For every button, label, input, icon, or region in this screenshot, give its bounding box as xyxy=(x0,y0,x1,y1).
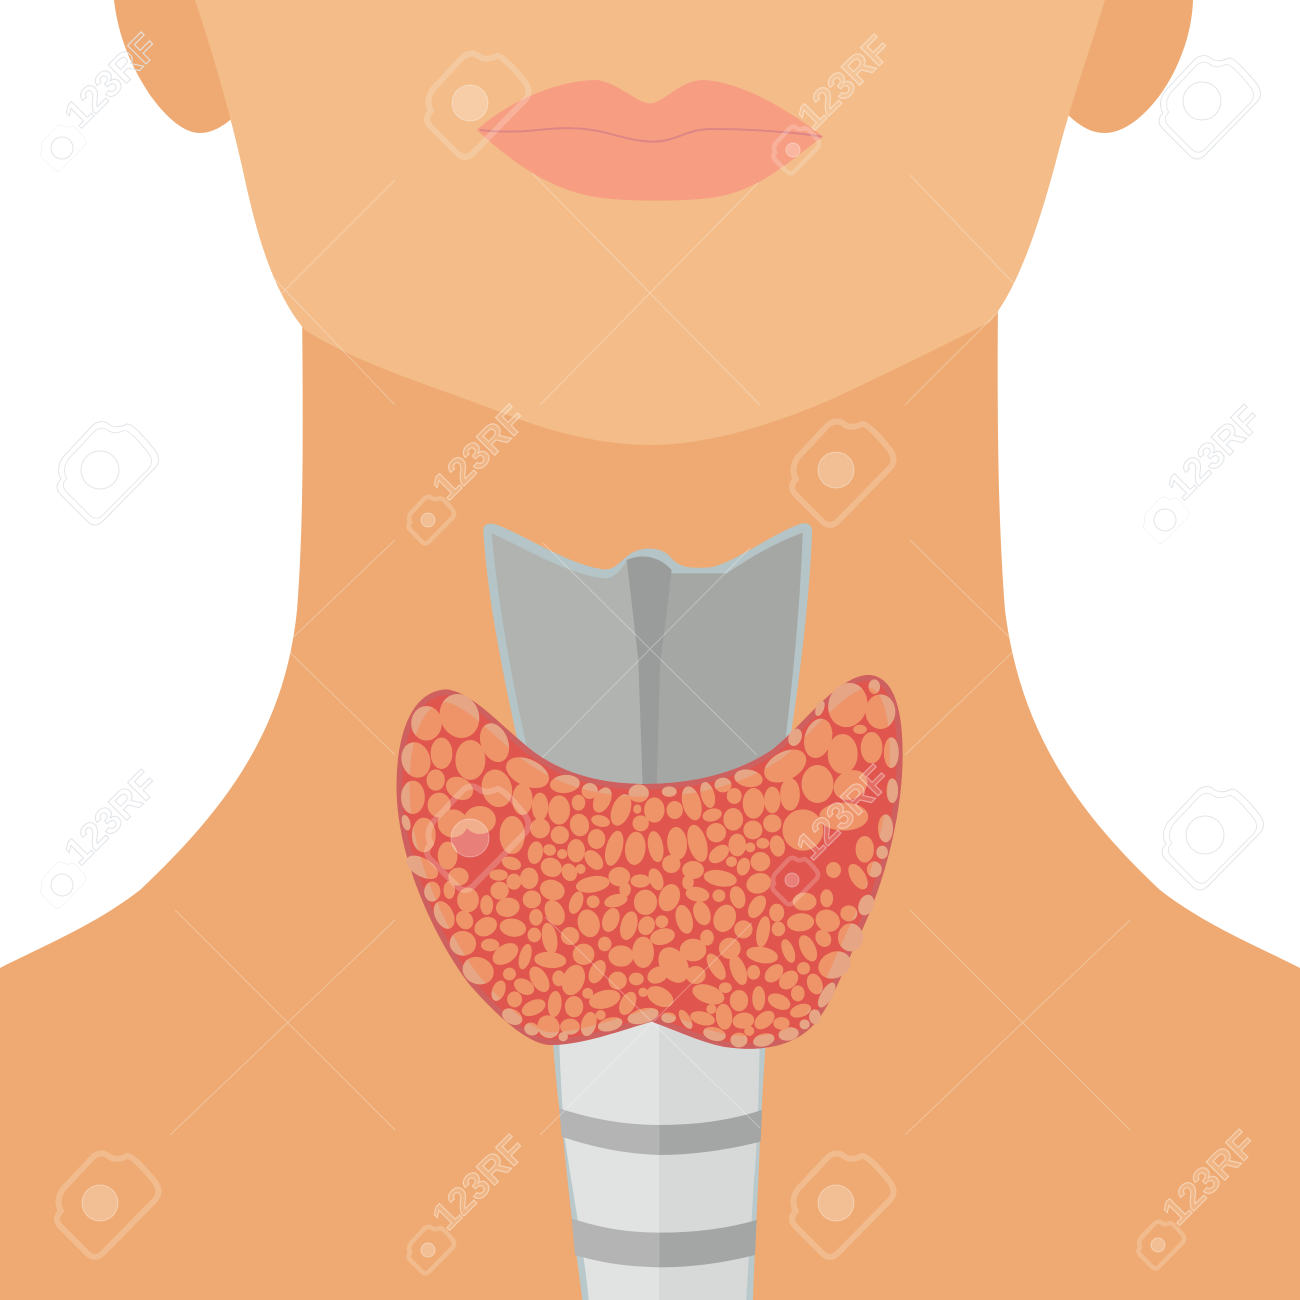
watermark: 123RF row 4 right xyxy=(1138,1123,1265,1268)
watermark: 123RF row 4 center xyxy=(408,1128,535,1273)
watermark: 123RF row 3 center: 123RF xyxy=(789,758,899,868)
upper and lower lip xyxy=(477,80,823,201)
mouth line xyxy=(480,128,822,142)
watermark diagonal lines xyxy=(170,173,1130,1135)
ear: left xyxy=(114,0,240,133)
watermark: 123RF row 2 center: 123RF xyxy=(425,398,535,508)
ear: right xyxy=(1065,0,1193,133)
watermark: 123RF top center xyxy=(773,28,900,173)
trachea outer wall xyxy=(552,1020,767,1300)
watermark: egg row 3 right xyxy=(1162,786,1264,890)
larynx outer wall xyxy=(483,523,812,787)
thyroid border xyxy=(397,675,903,1049)
watermark: 123RF top center: 123RF xyxy=(790,28,900,138)
larynx cartilage xyxy=(483,523,812,787)
watermark: 123RF row 4 right: 123RF xyxy=(1155,1123,1265,1233)
watermark: 123RF row 2 right xyxy=(1143,398,1270,543)
thyroid follicles xyxy=(401,679,899,1048)
watermark: 123RF row 3 left xyxy=(40,763,167,908)
larynx left plate xyxy=(492,533,650,787)
cartilage ring 2 xyxy=(572,1218,757,1267)
larynx center ridge xyxy=(627,557,672,787)
trachea left face xyxy=(559,1020,659,1300)
lips xyxy=(477,80,823,201)
watermark: egg row 2 left xyxy=(57,422,158,525)
cartilage ring 1 xyxy=(559,1108,762,1155)
watermark: 123RF row 4 center: 123RF xyxy=(425,1128,535,1238)
watermark: egg top center xyxy=(427,54,528,157)
trachea xyxy=(552,1020,767,1300)
watermark: egg top right xyxy=(1159,56,1260,159)
watermark: egg row 4 left xyxy=(57,1154,158,1257)
thyroid tissue xyxy=(397,675,903,1049)
watermark: 123RF row 3 center xyxy=(772,758,899,904)
face xyxy=(195,0,1105,445)
watermark: 123RF row 2 center xyxy=(408,398,535,543)
watermark: 123RF row 2 right: 123RF xyxy=(1160,398,1270,508)
neck and shoulders xyxy=(0,300,1300,1300)
watermark: egg row 2 right xyxy=(792,422,894,525)
watermark: 123RF row 3 left: 123RF xyxy=(57,763,167,873)
watermark: 123RF top left: 123RF xyxy=(57,26,167,136)
trachea right face xyxy=(659,1020,760,1300)
watermark: egg row 3 center xyxy=(427,786,528,890)
larynx right plate xyxy=(647,533,803,787)
watermark: egg row 4 right xyxy=(792,1154,894,1257)
thyroid gland xyxy=(396,675,903,1049)
watermark: 123RF top left xyxy=(40,26,167,171)
